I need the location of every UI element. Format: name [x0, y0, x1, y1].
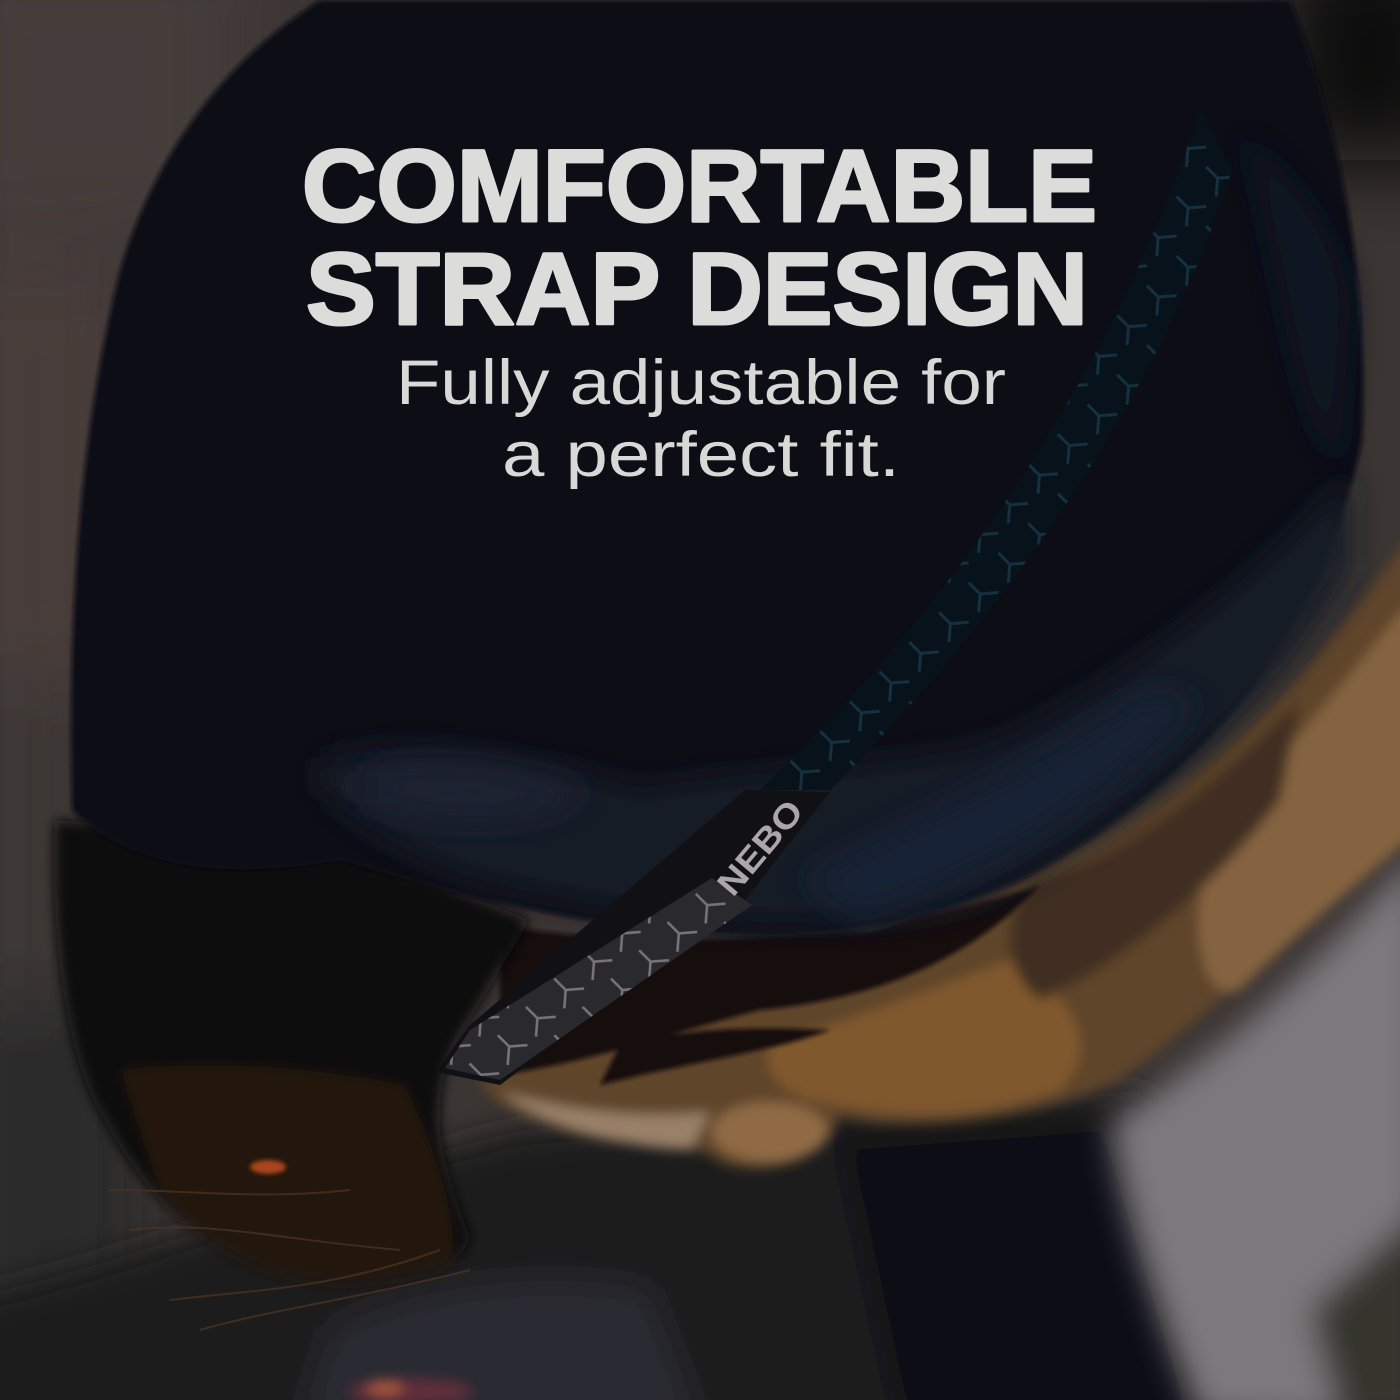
strap with pattern [436, 110, 1232, 1085]
hair above ear [500, 885, 1040, 1085]
strap near section, grey [436, 790, 830, 1085]
face and neck skin [480, 520, 1400, 1168]
title: comfortable strap design: COMFORTABLE [302, 129, 1097, 243]
subtitle [396, 348, 1006, 490]
title: comfortable strap design [302, 129, 1097, 346]
beanie [71, 0, 1363, 936]
jacket and shoulders [0, 1090, 1300, 1400]
strap logo NEBO: NEBO [710, 793, 811, 903]
collar: grey shirt [1110, 850, 1400, 1400]
subtitle: a perfect fit. [502, 420, 900, 490]
title: comfortable strap design: STRAP DESIGN [306, 232, 1088, 346]
hair fringe [54, 820, 530, 1330]
strap far section, dark blue on beanie [760, 110, 1232, 790]
subtitle: Fully adjustable for [396, 348, 1006, 418]
patch of colour at bottom [348, 1378, 472, 1400]
